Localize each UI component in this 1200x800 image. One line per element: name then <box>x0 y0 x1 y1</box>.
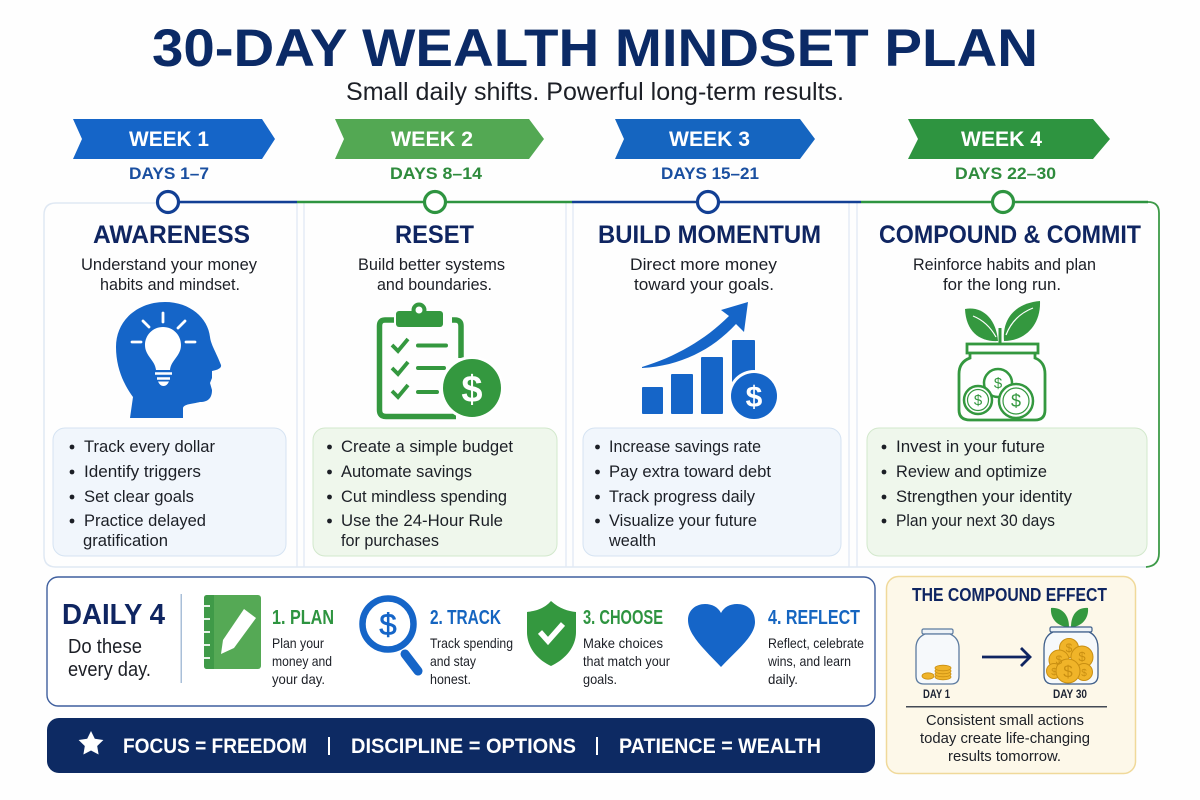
label: day 30: DAY 30 <box>1053 687 1087 701</box>
icon: day 30 jar with sprout: $ <box>1063 662 1073 681</box>
title: 30-DAY WEALTH MINDSET PLAN <box>152 19 1038 78</box>
icon: day 1 jar <box>916 629 959 684</box>
bullet list: week 3: Pay extra toward debt <box>609 463 771 481</box>
icon: day 30 jar with sprout: $ <box>1078 649 1086 664</box>
item: plan: your day. <box>272 671 325 687</box>
ribbon: week 3 <box>615 119 815 159</box>
heading: reset: RESET <box>395 221 474 249</box>
days label: week 2: DAYS 8–14 <box>390 165 483 183</box>
panel: week 4 <box>867 119 1147 556</box>
icon: jar of coins with sprout <box>959 301 1045 420</box>
banner: focus discipline patience: FOCUS = FREEDOM <box>123 735 307 758</box>
bullet list: week 1: Set clear goals <box>84 488 194 506</box>
bullet list: week 4: Strengthen your identity <box>896 488 1073 506</box>
description: week 2: Build better systems <box>358 256 505 274</box>
icon: rising bar chart with coin <box>642 302 780 422</box>
bullet list: week 2: Use the 24-Hour Rule <box>341 512 503 530</box>
ribbon: week 3: WEEK 3 <box>669 128 750 151</box>
label: day 1: DAY 1 <box>923 687 950 701</box>
days label: week 3: DAYS 15–21 <box>661 165 759 183</box>
bullet list: week 3 <box>583 428 841 556</box>
text: do these every day: Do these <box>68 636 142 658</box>
item: choose: Make choices <box>583 635 663 651</box>
bullet list: week 2: Automate savings <box>341 463 472 481</box>
heading: the compound effect: THE COMPOUND EFFECT <box>912 585 1107 605</box>
description: week 1: habits and mindset. <box>100 276 240 294</box>
icon: day 30 jar with sprout <box>1044 608 1098 684</box>
description: week 2 <box>358 256 505 294</box>
item: track: honest. <box>430 671 471 687</box>
icon: notebook and pencil <box>204 595 261 669</box>
ribbon: week 2: WEEK 2 <box>391 128 473 151</box>
text: compound effect message: results tomorrow. <box>948 748 1061 765</box>
description: week 2: and boundaries. <box>377 276 492 294</box>
icon: shield with check <box>527 601 576 666</box>
heading: daily 4: DAILY 4 <box>62 599 165 631</box>
bullet list: week 4: Plan your next 30 days <box>896 512 1055 530</box>
panel: week 3 <box>583 119 841 556</box>
icon: head with light bulb <box>116 302 221 418</box>
panel: outer card frame <box>44 202 1159 567</box>
icon: jar of coins with sprout: $ <box>974 392 983 409</box>
item: track: Track spending <box>430 635 513 651</box>
bullet list: week 4 <box>867 428 1147 556</box>
text: compound effect message: today create life-changing <box>920 730 1090 747</box>
icon: jar of coins with sprout: $ <box>1011 391 1021 411</box>
item: track: 2. TRACK <box>430 607 501 629</box>
bullet list: week 2: Create a simple budget <box>341 438 513 456</box>
days label: week 1: DAYS 1–7 <box>129 165 209 183</box>
bullet list: week 3: wealth <box>608 532 656 550</box>
item: choose: 3. CHOOSE <box>583 607 663 629</box>
item: track: and stay <box>430 653 476 669</box>
icon: jar of coins with sprout: $ <box>994 375 1003 392</box>
description: week 4 <box>913 256 1096 294</box>
panel: week 1 <box>53 119 286 556</box>
heading: build momentum: BUILD MOMENTUM <box>598 221 821 249</box>
panel: week 2 <box>313 119 557 556</box>
bullet list: week 3: Increase savings rate <box>609 438 761 456</box>
ribbon: week 1 <box>73 119 275 159</box>
bullet list: week 1: Identify triggers <box>84 463 201 481</box>
description: week 3: toward your goals. <box>634 276 774 294</box>
item: reflect: wins, and learn <box>767 653 851 669</box>
icon: clipboard with dollar coin: $ <box>461 369 483 411</box>
banner: focus discipline patience: DISCIPLINE = OPTIONS <box>351 735 576 758</box>
text: compound effect message <box>920 712 1090 765</box>
icon: star <box>79 731 103 754</box>
icon: day 30 jar with sprout: $ <box>1051 667 1057 678</box>
icon: rising bar chart with coin: $ <box>746 381 763 414</box>
bullet list: week 2 <box>313 428 557 556</box>
description: week 1 <box>81 256 258 294</box>
heading: awareness: AWARENESS <box>93 221 250 249</box>
icon: day 30 jar with sprout: $ <box>1056 653 1063 667</box>
ribbon: week 1: WEEK 1 <box>129 128 209 151</box>
bullet list: week 4: Review and optimize <box>896 463 1047 481</box>
item: plan: money and <box>272 653 332 669</box>
timeline <box>158 192 1148 212</box>
bullet list: week 4: Invest in your future <box>896 438 1045 456</box>
item: reflect <box>688 604 864 687</box>
description: week 4: Reinforce habits and plan <box>913 256 1096 274</box>
description: week 3 <box>630 256 778 294</box>
arrow: day 1 to day 30 <box>982 648 1030 666</box>
description: week 4: for the long run. <box>943 276 1061 294</box>
icon: clipboard with dollar coin <box>380 302 504 420</box>
item: reflect: 4. REFLECT <box>768 607 860 629</box>
bullet list: week 3: Track progress daily <box>609 488 756 506</box>
item: choose: that match your <box>583 653 670 669</box>
ribbon: week 4: WEEK 4 <box>961 128 1042 151</box>
icon: day 30 jar with sprout: $ <box>1081 668 1087 679</box>
days label: week 4: DAYS 22–30 <box>955 165 1056 183</box>
text: compound effect message: Consistent small actions <box>926 712 1084 729</box>
item: reflect: daily. <box>768 671 798 687</box>
text: do these every day <box>68 636 151 681</box>
bullet list: week 1: Practice delayed <box>84 512 206 530</box>
description: week 3: Direct more money <box>630 256 778 274</box>
item: plan <box>204 595 334 687</box>
icon: magnifying glass with dollar: $ <box>379 607 397 642</box>
item: reflect: Reflect, celebrate <box>768 635 864 651</box>
bullet list: week 3: Visualize your future <box>609 512 757 530</box>
subtitle: Small daily shifts. Powerful long-term results. <box>346 78 844 106</box>
ribbon: week 4 <box>908 119 1110 159</box>
bullet list: week 1: gratification <box>83 532 168 550</box>
bullet list: week 1: Track every dollar <box>84 438 216 456</box>
item: track <box>362 598 513 687</box>
item: choose <box>527 601 670 687</box>
ribbon: week 2 <box>335 119 544 159</box>
icon: magnifying glass with dollar <box>362 598 418 671</box>
icon: heart <box>688 604 755 667</box>
item: choose: goals. <box>583 671 617 687</box>
icon: day 30 jar with sprout: $ <box>1066 641 1073 655</box>
text: do these every day: every day. <box>68 659 151 681</box>
bullet list: week 1 <box>53 428 286 556</box>
banner: focus discipline patience: PATIENCE = WEALTH <box>619 735 821 758</box>
description: week 1: Understand your money <box>81 256 258 274</box>
heading: compound and commit: COMPOUND & COMMIT <box>879 221 1141 249</box>
panel: daily 4 <box>47 577 875 706</box>
panel: the compound effect <box>886 576 1136 774</box>
bullet list: week 2: for purchases <box>341 532 439 550</box>
item: plan: Plan your <box>272 635 324 651</box>
item: plan: 1. PLAN <box>272 607 334 629</box>
banner: focus discipline patience <box>47 718 875 773</box>
bullet list: week 2: Cut mindless spending <box>341 488 507 506</box>
